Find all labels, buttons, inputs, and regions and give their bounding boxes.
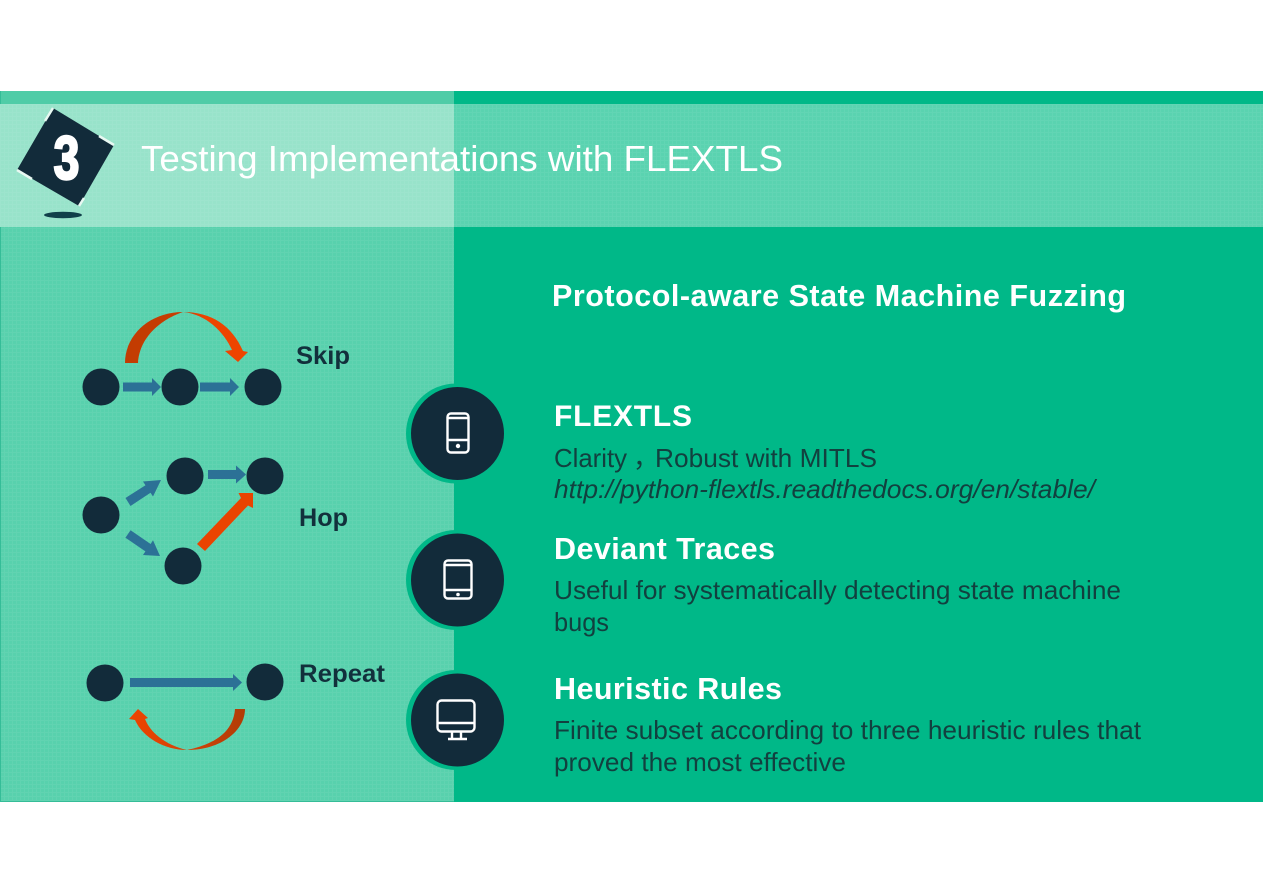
icon: tablet <box>406 530 506 630</box>
text block: FLEXTLS: Clarity <box>554 443 627 473</box>
label: Repeat: Repeat <box>299 660 386 688</box>
text block: FLEXTLS: ， <box>633 443 659 473</box>
heading: protocol-aware: Protocol-aware State Machine Fuzzing <box>552 279 1126 313</box>
text block: FLEXTLS: Robust with MITLS <box>655 443 877 473</box>
title: Testing Implementations with FLEXTLS <box>141 138 783 179</box>
text block: Heuristic Rules: Finite subset according to three heuristic rules that <box>554 715 1142 745</box>
text block: Heuristic Rules: proved the most effective <box>554 747 846 777</box>
text block: Deviant Traces: Deviant Traces <box>554 532 775 566</box>
diagram: repeat <box>86 660 386 750</box>
text block: Heuristic Rules: Heuristic Rules <box>554 672 782 706</box>
text block: FLEXTLS: http://python-flextls.readthedocs.org/en/stable/ <box>554 474 1098 504</box>
label: Skip: Skip <box>296 342 350 370</box>
background panel: right green <box>0 91 1263 802</box>
panel: left illustrations <box>0 91 454 802</box>
diagram: skip <box>82 312 350 406</box>
text block: FLEXTLS: FLEXTLS <box>554 400 692 433</box>
header band <box>0 104 1263 227</box>
label: Hop: Hop <box>299 504 348 532</box>
text block: Deviant Traces: Useful for systematically detecting state machine <box>554 575 1121 605</box>
text block: FLEXTLS <box>554 400 1098 504</box>
icon: number 3 badge <box>17 108 114 218</box>
text block: Heuristic Rules <box>554 672 1142 777</box>
text block: Deviant Traces: bugs <box>554 607 609 637</box>
icon: monitor <box>406 670 506 770</box>
diagram: hop <box>82 458 348 584</box>
icon: phone <box>406 384 506 484</box>
text block: Deviant Traces <box>554 532 1121 637</box>
icon: number 3 badge: 3 <box>54 125 79 193</box>
